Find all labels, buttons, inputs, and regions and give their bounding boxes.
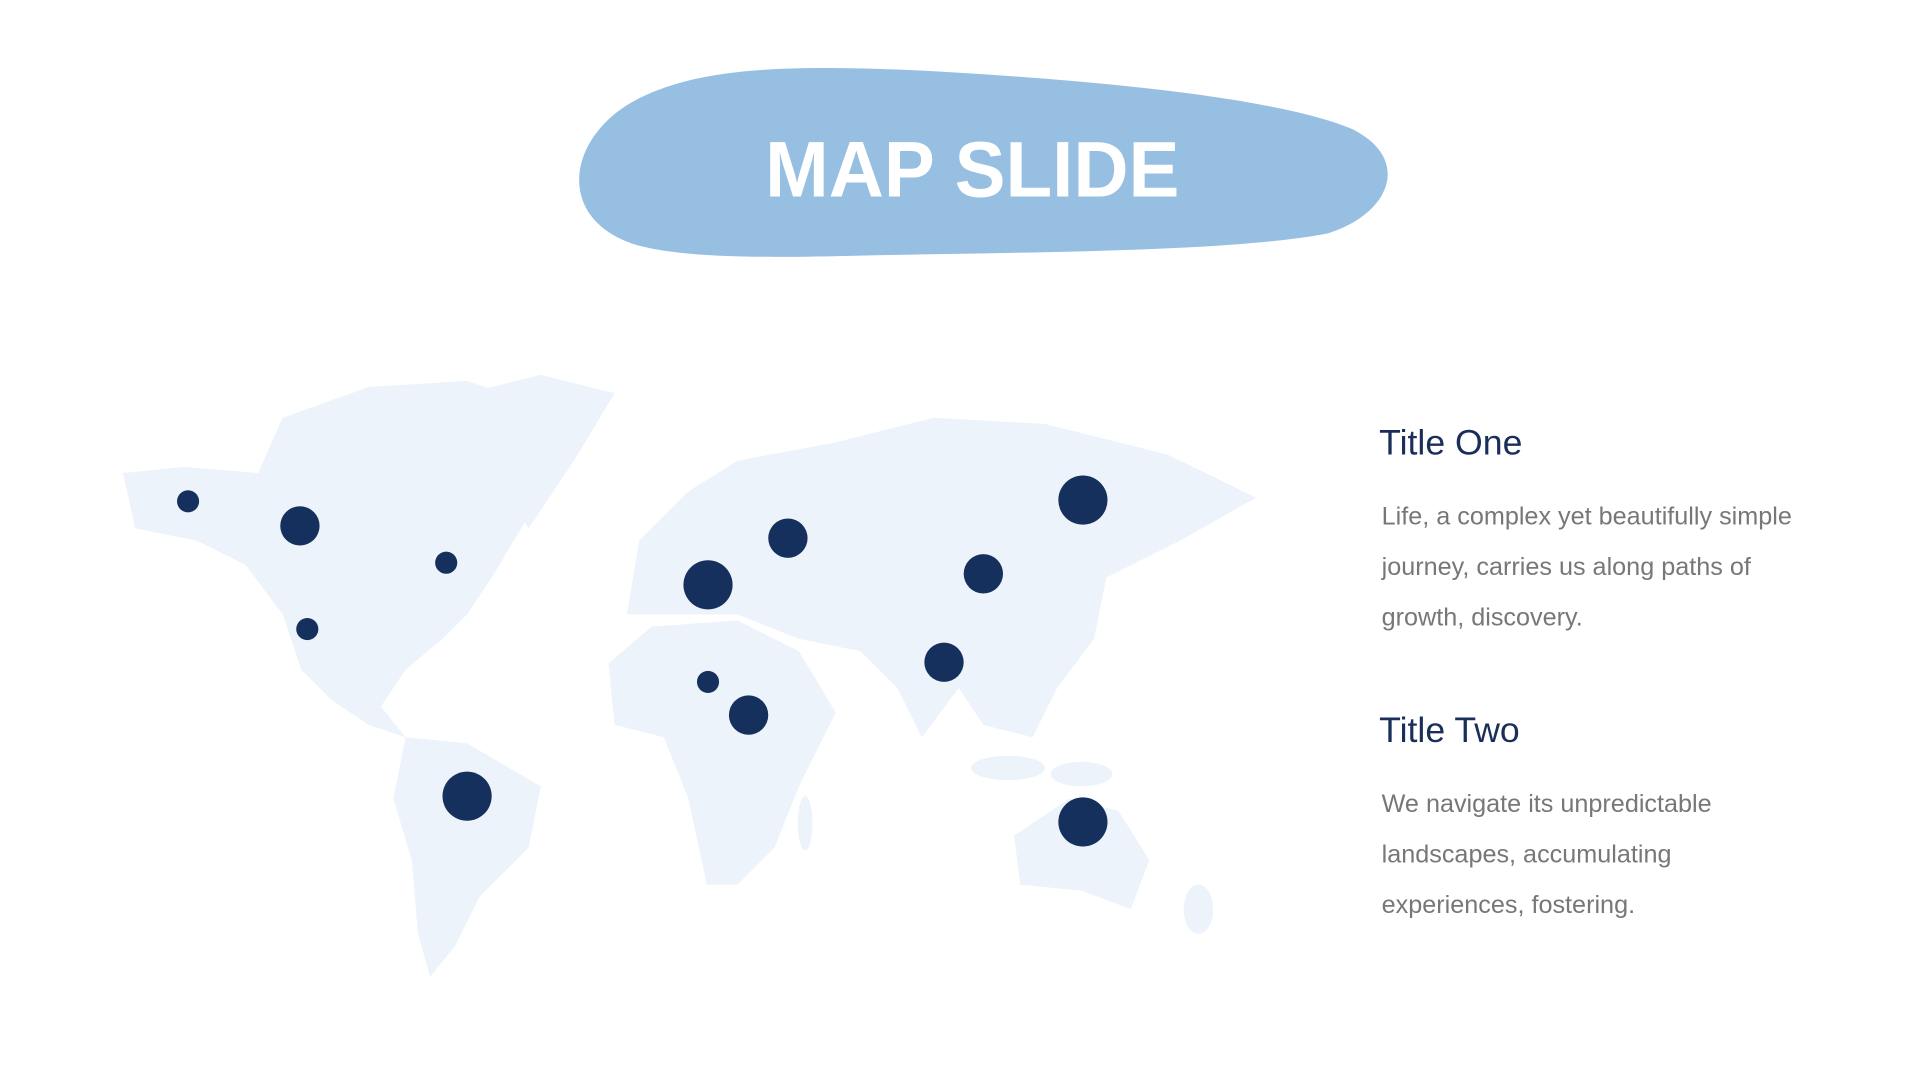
text block: title two: Title Two — [1379, 710, 1520, 750]
text block: title one: Title One — [1379, 423, 1522, 463]
world map — [123, 375, 1256, 977]
text block: title two: experiences, fostering. — [1382, 891, 1635, 919]
text block: title one: Life, a complex yet beautifully simple — [1382, 503, 1792, 531]
title text: MAP SLIDE — [765, 126, 1179, 214]
text block: title one: growth, discovery. — [1382, 603, 1583, 631]
text block: title one: journey, carries us along paths of — [1381, 553, 1752, 581]
location dots — [177, 475, 1108, 847]
text block: title one — [1379, 423, 1792, 631]
text block: title two — [1379, 710, 1712, 919]
title banner — [579, 68, 1388, 257]
text block: title two: We navigate its unpredictable — [1382, 790, 1712, 818]
text block: title two: landscapes, accumulating — [1382, 841, 1672, 869]
